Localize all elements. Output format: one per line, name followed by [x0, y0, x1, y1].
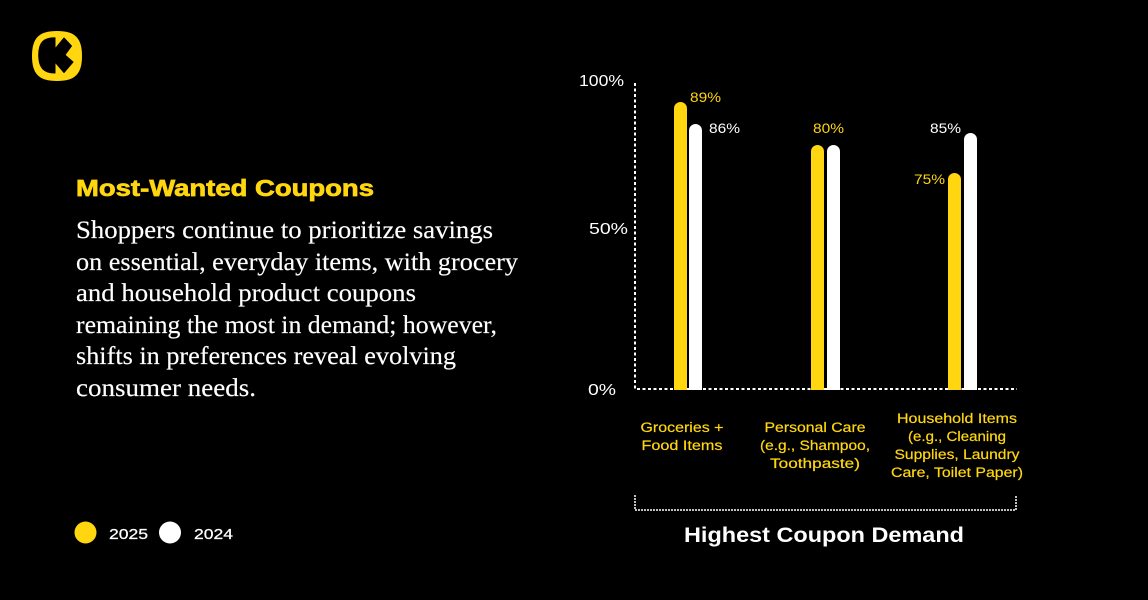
value labels	[690, 90, 961, 187]
legend: 2025	[109, 526, 148, 543]
value labels: 85%	[930, 121, 961, 136]
category label: groceries: Food Items	[642, 438, 723, 453]
category label: groceries	[640, 420, 724, 453]
body text: remaining the most in demand; however,	[76, 310, 497, 339]
category label: household items: Household Items	[897, 411, 1017, 426]
value labels: 75%	[914, 172, 945, 187]
y-axis labels: 0%	[588, 382, 616, 399]
body text: shifts in preferences reveal evolving	[76, 341, 456, 370]
category label: personal care: Toothpaste)	[770, 456, 860, 471]
body text: Shoppers continue to prioritize savings	[76, 215, 493, 244]
bar chart	[579, 73, 1023, 480]
body text: on essential, everyday items, with grocery	[76, 247, 518, 276]
value labels: 86%	[709, 121, 740, 136]
category label: personal care	[760, 420, 870, 471]
legend	[74, 522, 233, 544]
legend: 2024	[194, 526, 233, 543]
category label: household items	[891, 411, 1023, 480]
heading: Most-Wanted Coupons	[76, 175, 374, 201]
icon: brand logo	[32, 31, 82, 81]
chart title: Highest Coupon Demand	[684, 524, 964, 547]
chart axes	[635, 83, 1017, 389]
category label: personal care: Personal Care	[764, 420, 866, 435]
y-axis labels: 100%	[579, 73, 624, 90]
bars: personal care	[811, 145, 840, 390]
value labels: 89%	[690, 90, 721, 105]
y-axis labels	[579, 73, 628, 399]
body text: consumer needs.	[76, 373, 256, 402]
bars: household items	[948, 133, 977, 390]
y-axis labels: 50%	[589, 221, 628, 238]
category label: household items: Supplies, Laundry	[894, 447, 1020, 462]
category label: groceries: Groceries +	[640, 420, 724, 435]
category label: household items: (e.g., Cleaning	[908, 429, 1006, 444]
body text: and household product coupons	[76, 278, 416, 307]
bars: groceries	[674, 102, 702, 390]
bracket	[635, 495, 1016, 510]
body text	[76, 215, 518, 402]
category label: personal care: (e.g., Shampoo,	[760, 438, 870, 453]
category label: household items: Care, Toilet Paper)	[891, 465, 1023, 480]
value labels: 80%	[813, 121, 844, 136]
